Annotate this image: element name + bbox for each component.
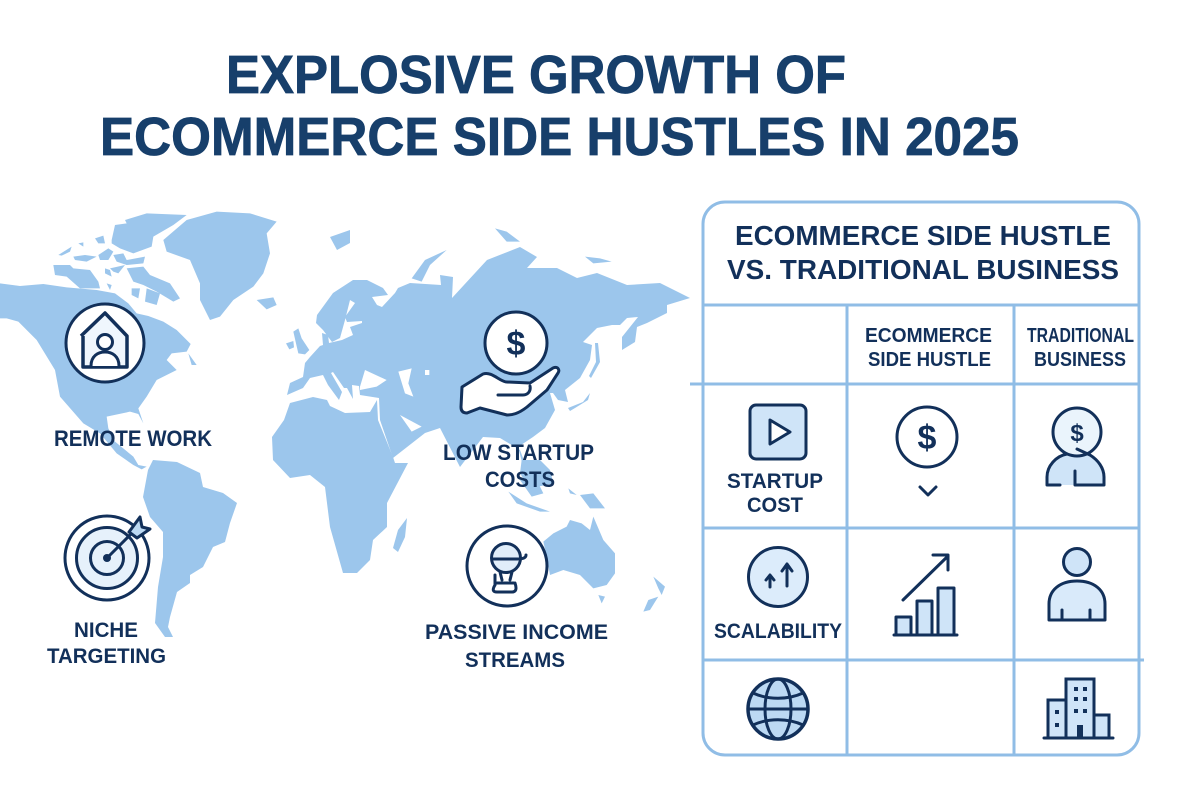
south america bbox=[143, 460, 237, 637]
oceania islands and australia bbox=[508, 480, 665, 612]
icon: growth bar chart bbox=[894, 555, 957, 635]
title: ECOMMERCE SIDE HUSTLES IN 2025 bbox=[100, 107, 1019, 167]
africa bbox=[272, 397, 408, 573]
label: low startup costs: COSTS bbox=[485, 467, 555, 492]
label: low startup costs: LOW STARTUP bbox=[443, 440, 594, 465]
label: passive income streams bbox=[425, 621, 608, 672]
row label: startup cost: COST bbox=[747, 494, 803, 517]
icon: low startup costs bbox=[461, 312, 559, 415]
icon: traditional cost person bbox=[1047, 408, 1104, 485]
european islands bbox=[286, 328, 309, 354]
icon: single person bbox=[1049, 548, 1105, 620]
column header: ecommerce side hustle: ECOMMERCE bbox=[865, 325, 992, 347]
label: passive income streams: PASSIVE INCOME bbox=[425, 621, 608, 644]
eurasia bbox=[287, 247, 690, 482]
label: passive income streams: STREAMS bbox=[465, 649, 565, 672]
row: startup cost icon bbox=[750, 405, 806, 459]
asian seas bbox=[360, 368, 429, 432]
row: scalability icon bbox=[748, 548, 808, 606]
table title bbox=[727, 220, 1119, 285]
row label: startup cost: STARTUP bbox=[727, 470, 823, 493]
world map bbox=[0, 212, 690, 637]
svalbard bbox=[330, 230, 350, 250]
table title: VS. TRADITIONAL BUSINESS bbox=[727, 254, 1119, 285]
north america mainland, greenland and iceland bbox=[0, 212, 277, 469]
column header: traditional business bbox=[1027, 325, 1134, 371]
label: niche targeting: NICHE bbox=[74, 619, 138, 642]
icon: niche targeting bbox=[65, 516, 150, 600]
table title: ECOMMERCE SIDE HUSTLE bbox=[735, 220, 1111, 251]
sakhalin and japan bbox=[568, 343, 600, 411]
label: niche targeting: TARGETING bbox=[47, 645, 166, 668]
madagascar bbox=[393, 518, 407, 552]
column header: ecommerce side hustle: SIDE HUSTLE bbox=[868, 349, 991, 371]
label: niche targeting bbox=[47, 619, 166, 668]
row label: scalability: SCALABILITY bbox=[714, 620, 842, 643]
canadian arctic islands bbox=[53, 213, 187, 305]
title bbox=[100, 45, 1019, 167]
panel: comparison table bbox=[690, 202, 1144, 755]
label: remote work: REMOTE WORK bbox=[54, 426, 212, 451]
icon: globe bbox=[748, 679, 808, 739]
column header: traditional business: TRADITIONAL bbox=[1027, 325, 1134, 347]
asian islands bbox=[412, 228, 612, 488]
column header: ecommerce side hustle bbox=[865, 325, 992, 371]
icon: office buildings bbox=[1044, 679, 1113, 738]
table grid bbox=[690, 202, 1144, 755]
icon: remote work bbox=[66, 304, 144, 382]
column header: traditional business: BUSINESS bbox=[1034, 349, 1126, 371]
icon: traditional cost person: $ bbox=[1070, 420, 1084, 447]
icon: low startup costs: $ bbox=[507, 325, 526, 363]
icon: dollar with down chevron bbox=[897, 407, 957, 495]
title: EXPLOSIVE GROWTH OF bbox=[226, 45, 846, 105]
row label: startup cost bbox=[727, 470, 823, 517]
icon: dollar with down chevron: $ bbox=[918, 419, 937, 457]
label: low startup costs bbox=[443, 440, 594, 492]
icon: passive income streams bbox=[467, 526, 547, 606]
